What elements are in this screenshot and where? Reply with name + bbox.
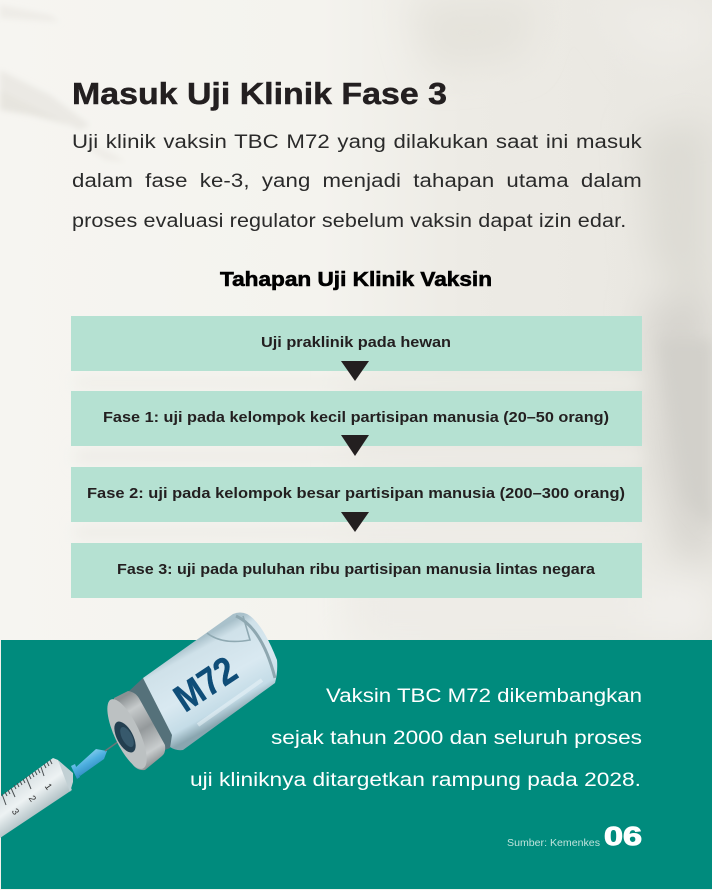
- arrow: phase 2 to phase 3: [341, 512, 369, 532]
- intro paragraph: dalam fase ke-3, yang menjadi tahapan utama dalam: [72, 170, 642, 192]
- syringe barrel: 3: [9, 807, 21, 817]
- closing statement: Vaksin TBC M72 dikembangkan: [326, 685, 642, 707]
- stage: phase 1: [71, 391, 642, 446]
- syringe barrel: 1: [42, 782, 54, 792]
- arrow: preclinical to phase 1: [341, 361, 369, 381]
- needle: [105, 739, 122, 751]
- vial cap: [100, 691, 165, 774]
- arrow: phase 1 to phase 2: [341, 435, 369, 456]
- needle hub: [71, 749, 107, 779]
- syringe barrel: [0, 758, 73, 838]
- page number: 06: [604, 821, 642, 851]
- bottom teal panel: [1, 640, 712, 889]
- stage: phase 2: Fase 2: uji pada kelompok besar partisipan manusia (200–300 orang): [87, 486, 625, 502]
- vial label text: M72: [167, 649, 245, 721]
- intro paragraph: [72, 131, 642, 232]
- syringe barrel: 2: [26, 794, 38, 804]
- stage: phase 3: Fase 3: uji pada puluhan ribu partisipan manusia lintas negara: [117, 562, 596, 578]
- stage: phase 2: [71, 467, 642, 522]
- stage: preclinical: Uji praklinik pada hewan: [261, 335, 451, 351]
- closing statement: uji kliniknya ditargetkan rampung pada 2028.: [190, 769, 641, 791]
- stage: phase 1: Fase 1: uji pada kelompok kecil partisipan manusia (20–50 orang): [103, 410, 609, 426]
- stage: preclinical: [71, 316, 642, 371]
- heading: Masuk Uji Klinik Fase 3: [72, 76, 447, 111]
- chart title: Tahapan Uji Klinik Vaksin: [220, 269, 492, 291]
- flow chart: vaccine trial stages: [71, 316, 642, 598]
- intro paragraph: Uji klinik vaksin TBC M72 yang dilakukan saat ini masuk: [72, 131, 642, 153]
- closing statement: sejak tahun 2000 dan seluruh proses: [271, 727, 642, 749]
- intro paragraph: proses evaluasi regulator sebelum vaksin dapat izin edar.: [72, 210, 626, 232]
- source note: Sumber: Kemenkes: [507, 838, 600, 849]
- stage: phase 3: [71, 543, 642, 598]
- vial body: [128, 612, 277, 752]
